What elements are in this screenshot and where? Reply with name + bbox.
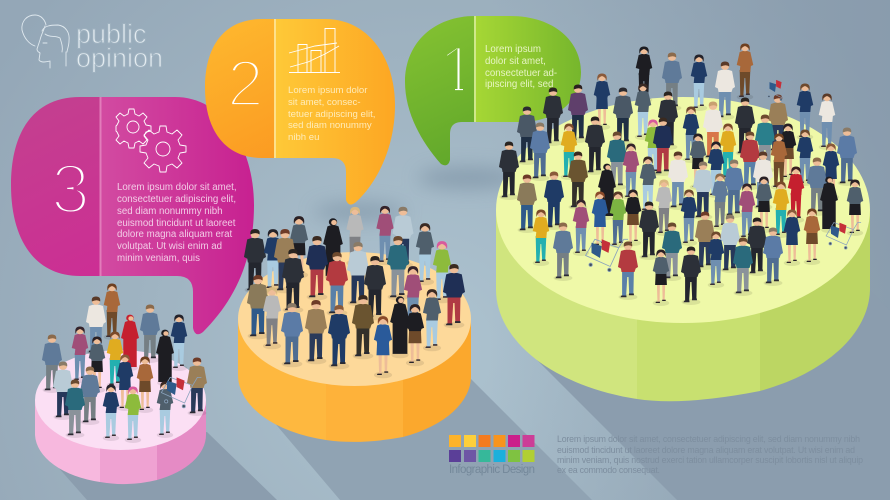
crowd: large platform [499, 44, 863, 306]
title: public opinion: public [76, 19, 147, 49]
panel: bubble 1 green [405, 16, 581, 166]
text block 3: Lorem ipsum dolor sit amet, [117, 182, 237, 193]
text block 2: nibh eu [288, 132, 319, 143]
footer text block: ex ea commodo consequat. [557, 465, 660, 475]
text block 1 [485, 44, 557, 90]
text block 1: Lorem ipsum [485, 44, 541, 55]
icon: two heads outline [22, 15, 69, 68]
text block 2: Lorem ipsum dolor [288, 85, 368, 96]
icon: shopping cart [161, 377, 201, 408]
text block 3: dolore magna aliquam erat [117, 229, 233, 240]
text block 2: sit amet, consec- [288, 97, 361, 108]
text block 2: tetuer adipiscing elit, [288, 109, 375, 120]
text block 3: minim veniam, quis [117, 253, 200, 264]
platform: small pink [35, 350, 206, 484]
icon: shopping carts [586, 239, 628, 272]
text block 2: sed diam nonummy [288, 120, 372, 131]
text block 3: sed diam nonummy nibh [117, 206, 223, 217]
panel: bubble 3 pink [11, 97, 254, 334]
number 2: 2 [227, 46, 264, 120]
footer text block: Lorem ipsum dolor sit amet, consectetuer adipiscing elit, sed diam nonummy nibh [557, 434, 860, 444]
crowd: medium platform [244, 206, 465, 378]
long shadow: small platform [50, 432, 277, 500]
title: public opinion: opinion [76, 43, 163, 73]
crowd: small platform [42, 284, 207, 443]
text block 1: consectetuer ad- [485, 68, 557, 79]
long shadow: medium platform [262, 378, 592, 500]
footer text block [557, 434, 863, 475]
platform: large green [496, 97, 870, 401]
text block 2 [288, 85, 375, 143]
icon: bar chart [289, 28, 340, 72]
text block 3: euismod tincidunt ut laoreet [117, 218, 236, 229]
panel: bubble 2 orange [200, 15, 400, 210]
number 3: 3 [51, 150, 90, 228]
title: public opinion [22, 15, 163, 73]
footer text block: euismod tincidunt ut laoreet dolore magna aliquam erat volutpat. Ut wisi enim ad [557, 445, 855, 455]
legend: infographic design: Infographic Design [449, 464, 535, 476]
text block 3 [117, 182, 237, 264]
text block 1: dolor sit amet, [485, 56, 546, 67]
platform: medium orange [238, 252, 471, 442]
text block 1: ipiscing elit, sed [485, 79, 553, 90]
footer text block: minim veniam, quis nostrud exerci tation ullamcorper suscipit lobortis nisl ut aliquip [557, 455, 863, 465]
icon: gears [116, 109, 186, 172]
number 1: 1 [439, 32, 476, 106]
colour swatches [449, 435, 534, 462]
text block 3: consectetuer adipiscing elit, [117, 194, 236, 205]
text block 3: volutpat. Ut wisi enim ad [117, 241, 222, 252]
soft shadows under bubbles [314, 167, 518, 221]
long shadow: large platform [520, 290, 890, 500]
legend: infographic design [449, 435, 535, 476]
